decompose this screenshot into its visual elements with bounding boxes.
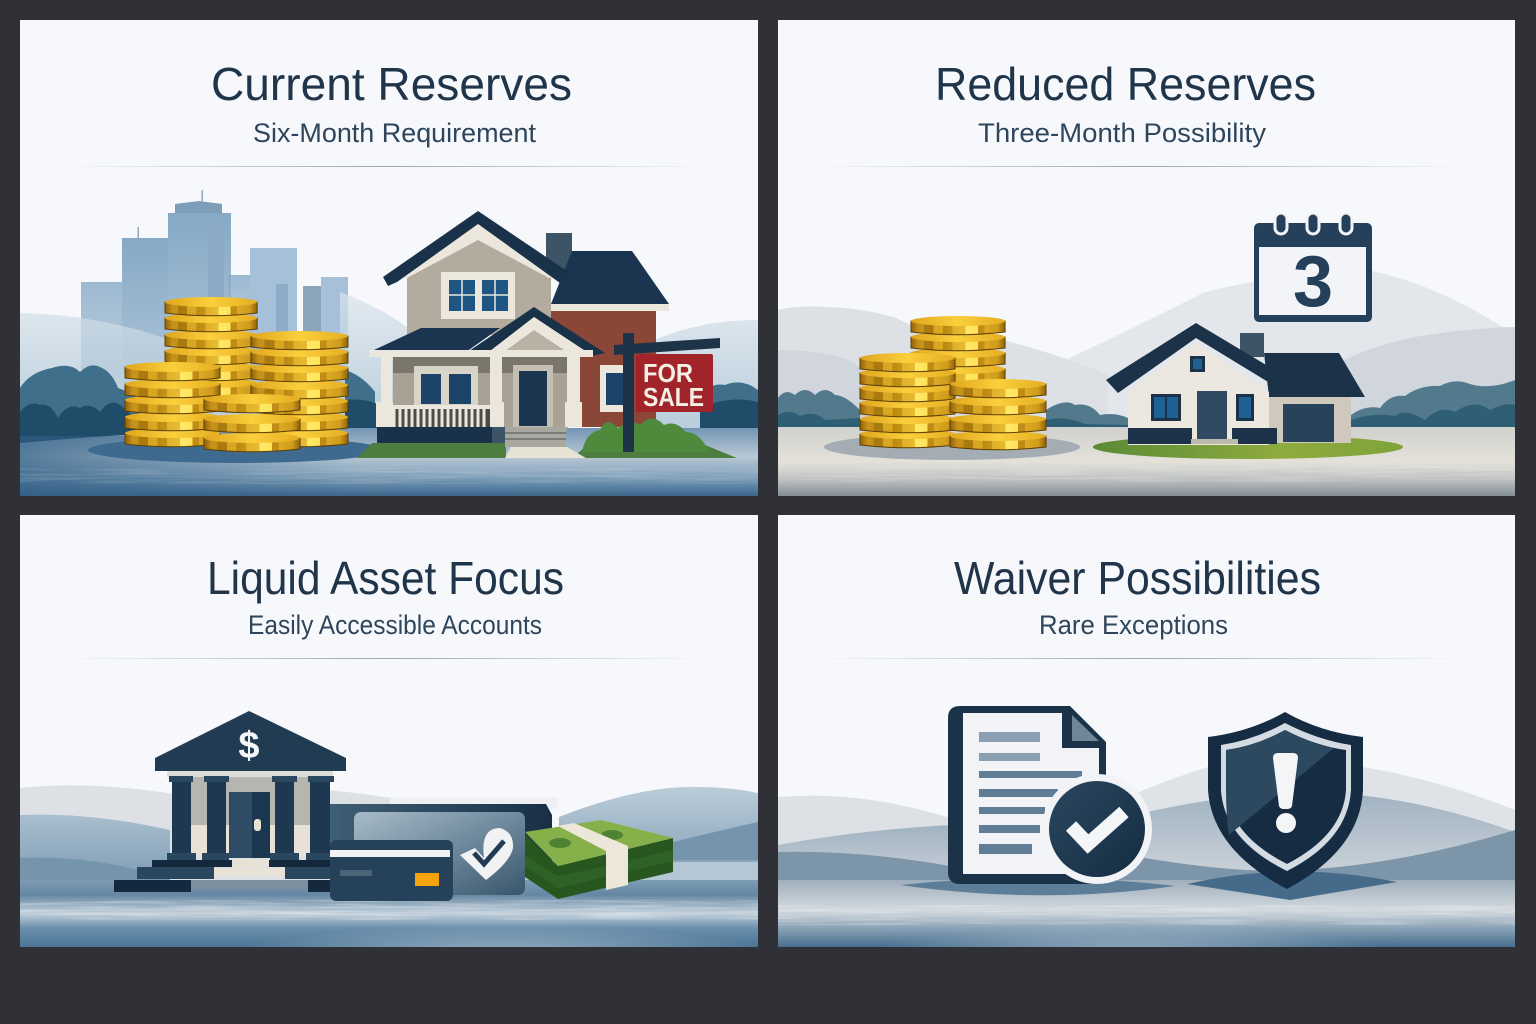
icon: calendar 3: 3 [1293, 242, 1333, 322]
panel: current reserves [20, 20, 758, 496]
lawn [1093, 438, 1403, 459]
ground [20, 428, 758, 496]
hills backdrop [20, 292, 758, 440]
small house [1106, 323, 1365, 445]
ground [778, 880, 1515, 947]
hills backdrop [1138, 767, 1515, 831]
trees [20, 365, 758, 418]
title: current reserves: Current Reserves [211, 58, 572, 110]
for sale sign: SALE [643, 382, 704, 412]
for sale sign: FOR [643, 358, 693, 388]
subtitle: six-month requirement: Six-Month Requirement [253, 118, 536, 148]
ground [778, 427, 1515, 496]
icon: cash stack [525, 820, 673, 899]
ground [20, 880, 758, 947]
title: reduced reserves: Reduced Reserves [935, 58, 1316, 110]
title: liquid asset focus: Liquid Asset Focus [207, 552, 564, 604]
icon: calendar 3 [1254, 219, 1372, 322]
panel: reduced reserves [778, 20, 1515, 496]
house with porch [357, 211, 737, 458]
coin stacks [860, 316, 1046, 450]
subtitle: rare exceptions: Rare Exceptions [1039, 610, 1228, 640]
icon: warning shield [1187, 712, 1397, 900]
hills backdrop [20, 785, 400, 880]
subtitle: easily accessible accounts: Easily Accessible Accounts [248, 610, 542, 640]
icon: document with check [900, 706, 1175, 895]
coin stacks [125, 297, 348, 452]
icon: bank: $ [238, 725, 260, 767]
icon: wallet and cards [330, 797, 558, 901]
title: waiver possibilities: Waiver Possibilities [954, 552, 1321, 604]
for sale sign [614, 333, 720, 452]
hills backdrop [1068, 271, 1503, 418]
panel: liquid asset focus [20, 515, 770, 985]
subtitle: three-month possibility: Three-Month Possibility [978, 118, 1267, 148]
panel: waiver possibilities [778, 515, 1515, 985]
icon: bank [114, 711, 346, 892]
trees [778, 380, 1515, 425]
city skyline [81, 190, 348, 408]
